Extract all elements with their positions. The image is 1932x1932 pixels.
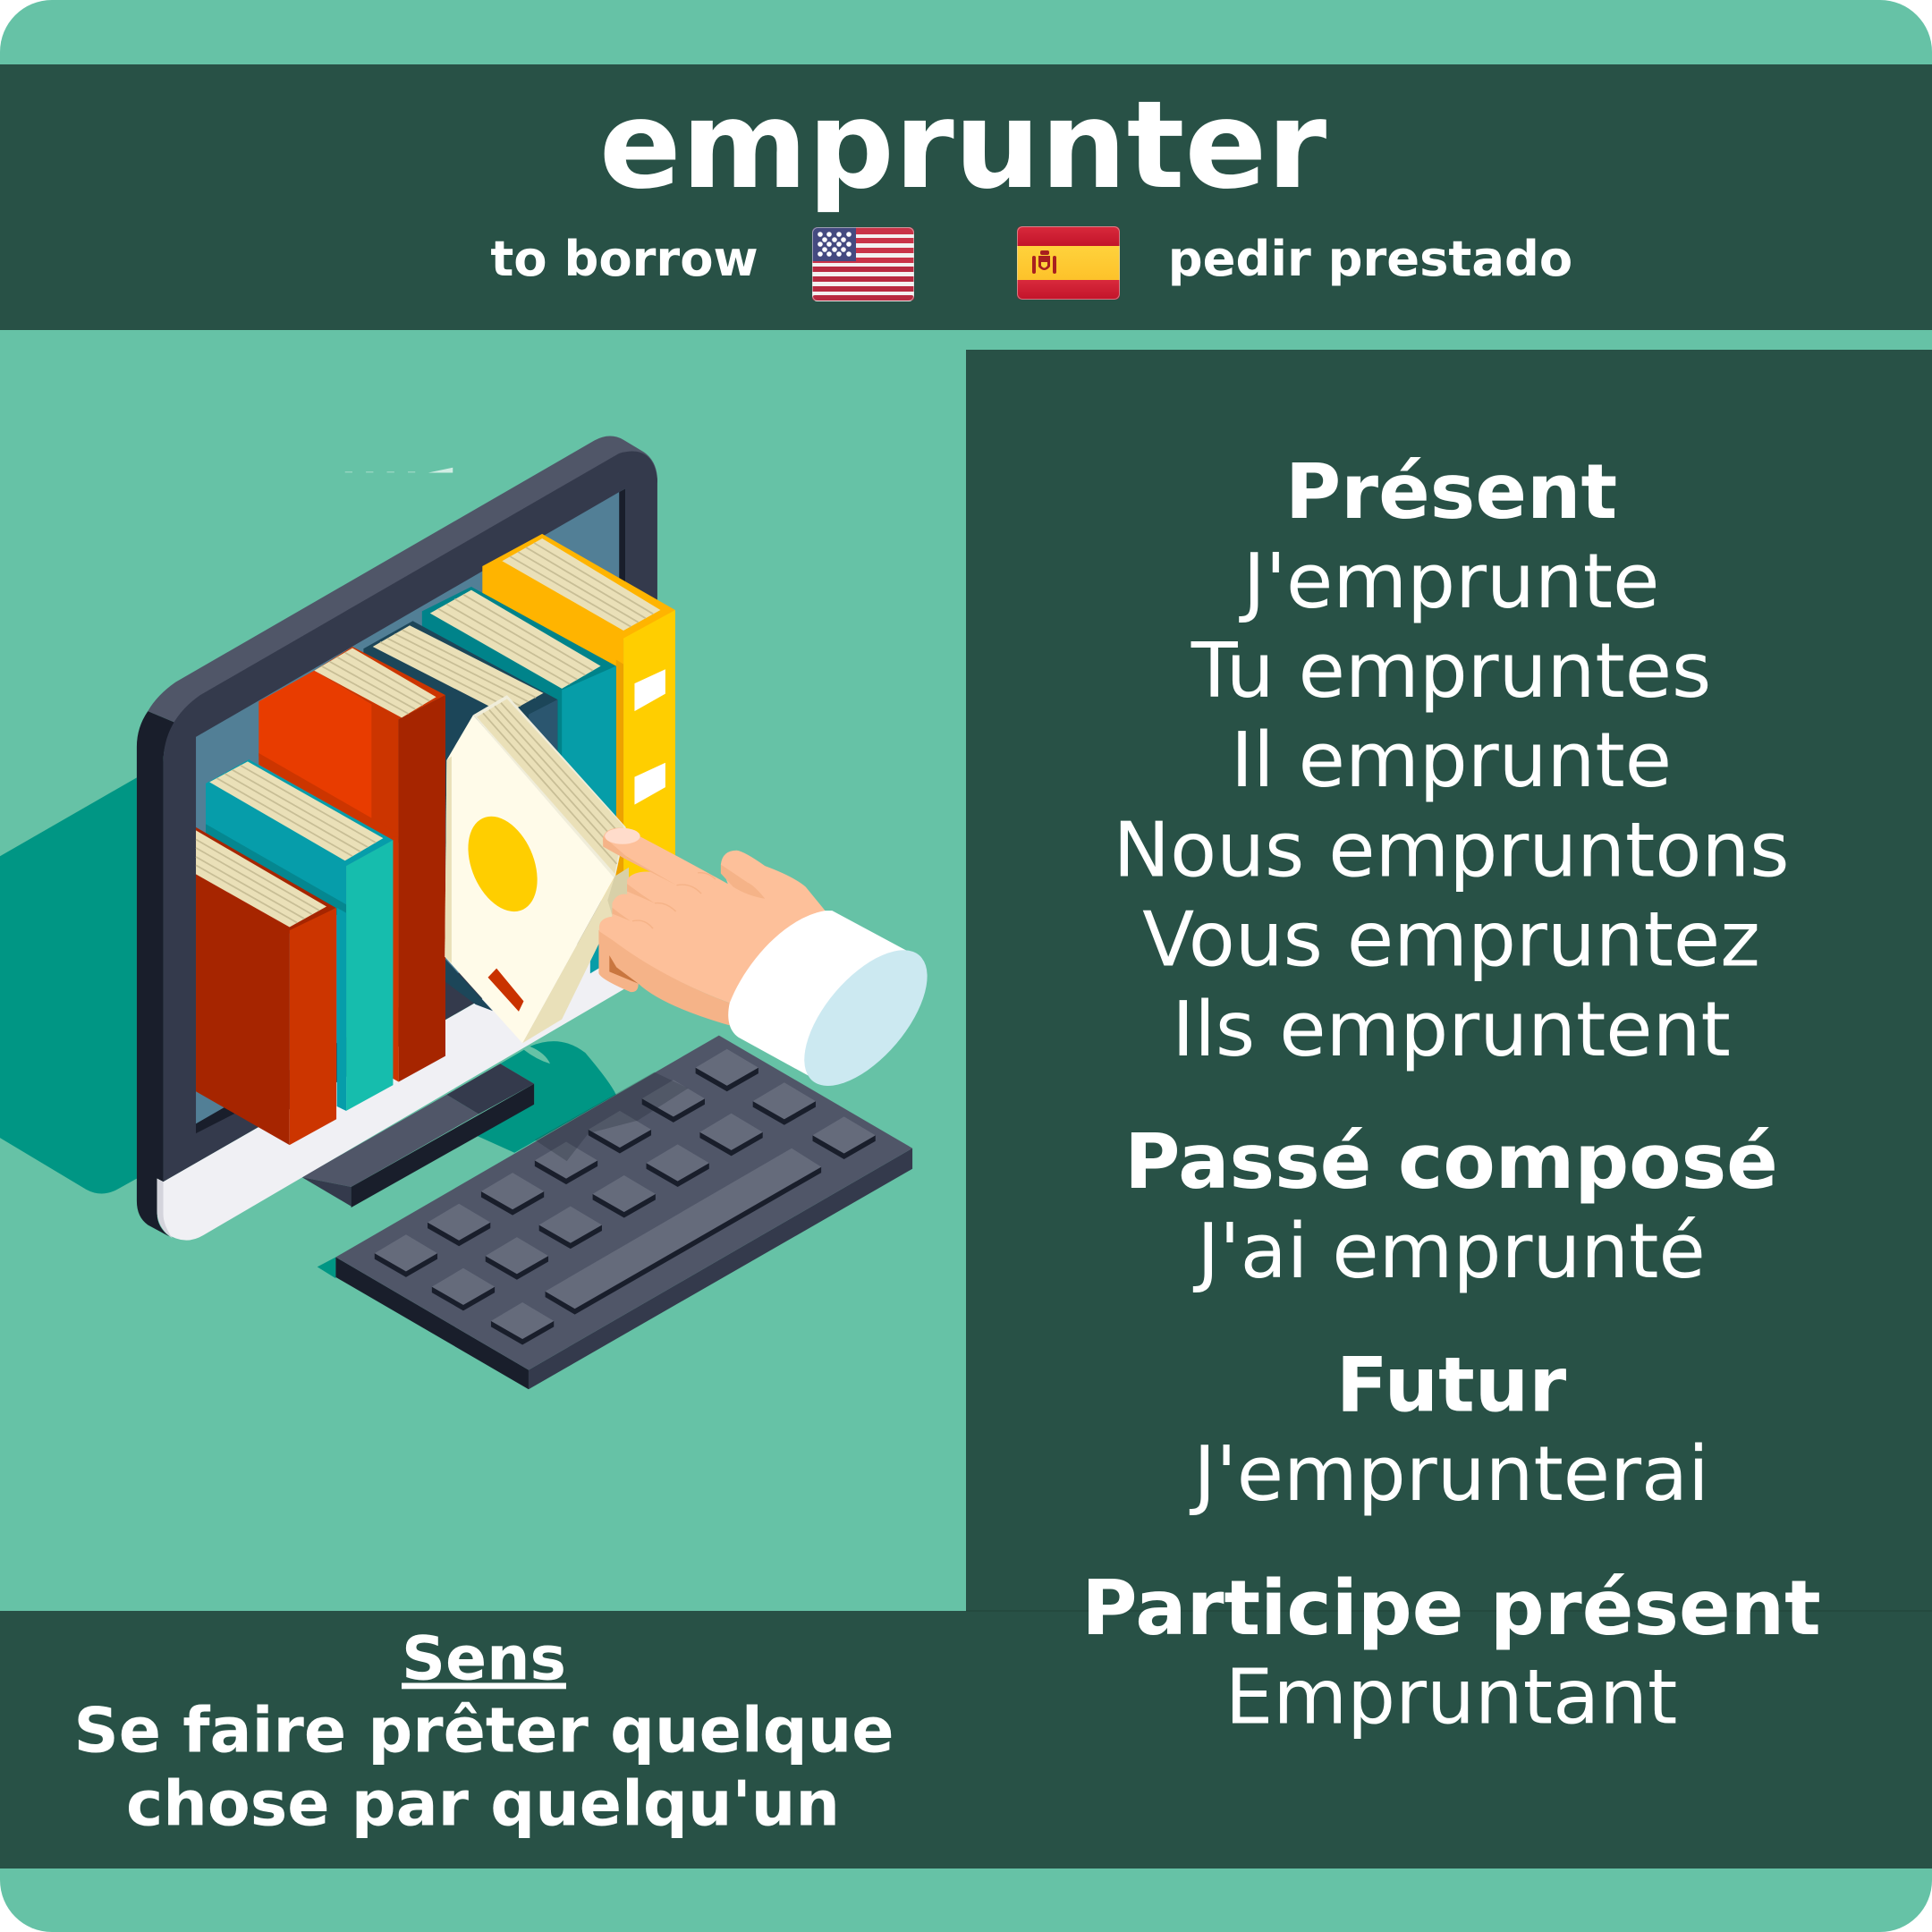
panel: meaning [0, 1611, 966, 1868]
english translation: to borrow [490, 231, 758, 287]
tense: présent: Ils empruntent [1172, 986, 1731, 1074]
meaning text: chose par quelqu'un [126, 1767, 840, 1841]
tense: passé composé: Passé composé [1124, 1118, 1778, 1207]
tense: présent: Vous empruntez [1142, 896, 1760, 984]
hand and cuff [598, 827, 952, 1103]
tense: futur: J'emprunterai [1189, 1430, 1709, 1519]
tense: présent: Il emprunte [1231, 716, 1672, 805]
spanish translation: pedir prestado [1168, 231, 1572, 287]
book: front red [196, 827, 336, 1145]
monitor stand [302, 1063, 534, 1208]
meaning text [74, 1694, 894, 1841]
meaning text: Se faire prêter quelque [74, 1694, 894, 1767]
book: tall red [258, 647, 445, 1081]
header band [0, 64, 1932, 330]
illustration: computer with books and hand [0, 436, 952, 1389]
book: yellow [482, 534, 675, 920]
icon: Spanish flag [1017, 226, 1120, 300]
tense: passé composé: J'ai emprunté [1192, 1208, 1706, 1296]
tense: participe présent [1081, 1564, 1821, 1742]
tense: présent: J'emprunte [1239, 538, 1659, 626]
tense: présent: Présent [1285, 448, 1617, 537]
book: pulled white book [445, 695, 626, 1043]
keyboard [335, 1036, 912, 1389]
tense: présent [1113, 448, 1789, 1074]
tense: présent: Tu empruntes [1191, 627, 1711, 716]
book: teal front [206, 759, 393, 1111]
monitor [137, 436, 657, 1241]
icon: US flag [812, 227, 914, 301]
stand shadow [474, 1041, 616, 1153]
tense: présent: Nous empruntons [1113, 807, 1789, 894]
book: dark blue [363, 621, 557, 1011]
keyboard shadow [318, 1258, 335, 1278]
book: teal back [422, 587, 616, 973]
panel: conjugations [966, 350, 1932, 1868]
tense: futur: Futur [1336, 1342, 1566, 1429]
monitor shadow [0, 777, 137, 1194]
tense: futur [1189, 1342, 1709, 1519]
meaning heading: Sens [402, 1624, 566, 1694]
tense: passé composé [1124, 1118, 1778, 1296]
tense: participe présent: Empruntant [1225, 1653, 1677, 1742]
tense: participe présent: Participe présent [1081, 1564, 1821, 1653]
title: emprunter [599, 74, 1326, 216]
